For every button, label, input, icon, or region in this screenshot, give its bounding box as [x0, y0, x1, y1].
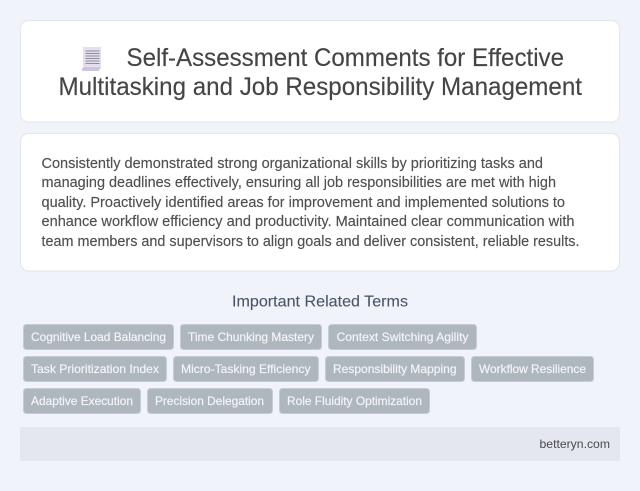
- text block: paragraph: team members and supervisors to align goals and deliver consistent, reliable results.: [42, 234, 580, 250]
- title: Multitasking and Job Responsibility Management: [58, 73, 582, 101]
- tag: Micro-Tasking Efficiency: [174, 356, 318, 382]
- panel: self-assessment paragraph: [20, 134, 620, 271]
- tag: Responsibility Mapping: [326, 356, 464, 382]
- tag: Context Switching Agility: [328, 324, 476, 350]
- text block: paragraph: [42, 156, 580, 250]
- footer: betteryn.com: [540, 437, 610, 451]
- text block: paragraph: enhance workflow efficiency and productivity. Maintained clear communication with: [42, 214, 574, 230]
- tag: Role Fluidity Optimization: Role Fluidity Optimization: [287, 394, 422, 408]
- tag: Adaptive Execution: Adaptive Execution: [31, 394, 133, 408]
- tag: Precision Delegation: Precision Delegation: [155, 394, 264, 408]
- tag: Task Prioritization Index: Task Prioritization Index: [31, 362, 159, 376]
- tag: Time Chunking Mastery: [180, 324, 322, 350]
- heading: important related terms: Important Related Terms: [232, 294, 408, 310]
- tag: Context Switching Agility: Context Switching Agility: [336, 330, 468, 344]
- tag: Cognitive Load Balancing: [24, 324, 174, 350]
- tag: Time Chunking Mastery: Time Chunking Mastery: [188, 330, 314, 344]
- title: Self-Assessment Comments for Effective: [126, 44, 564, 72]
- tag: Workflow Resilience: Workflow Resilience: [479, 362, 586, 376]
- text block: paragraph: quality. Proactively identified areas for improvement and implemented solutions to: [42, 195, 565, 211]
- panel: title card: [20, 20, 620, 122]
- tag: Responsibility Mapping: Responsibility Mapping: [333, 362, 456, 376]
- tag: Workflow Resilience: [472, 356, 594, 382]
- footer: [20, 427, 620, 461]
- icon: document scroll: [82, 47, 101, 71]
- panel: tags: [24, 324, 594, 414]
- tag: Cognitive Load Balancing: Cognitive Load Balancing: [31, 330, 166, 344]
- tag: Role Fluidity Optimization: [280, 388, 430, 414]
- title: [58, 44, 582, 101]
- text block: paragraph: Consistently demonstrated strong organizational skills by prioritizing tasks and: [42, 156, 543, 172]
- tag: Task Prioritization Index: [24, 356, 166, 382]
- tag: Precision Delegation: [148, 388, 272, 414]
- tag: Adaptive Execution: [24, 388, 140, 414]
- text block: paragraph: managing deadlines effectively, ensuring all job responsibilities are met with high: [42, 175, 556, 191]
- tag: Micro-Tasking Efficiency: Micro-Tasking Efficiency: [181, 362, 310, 376]
